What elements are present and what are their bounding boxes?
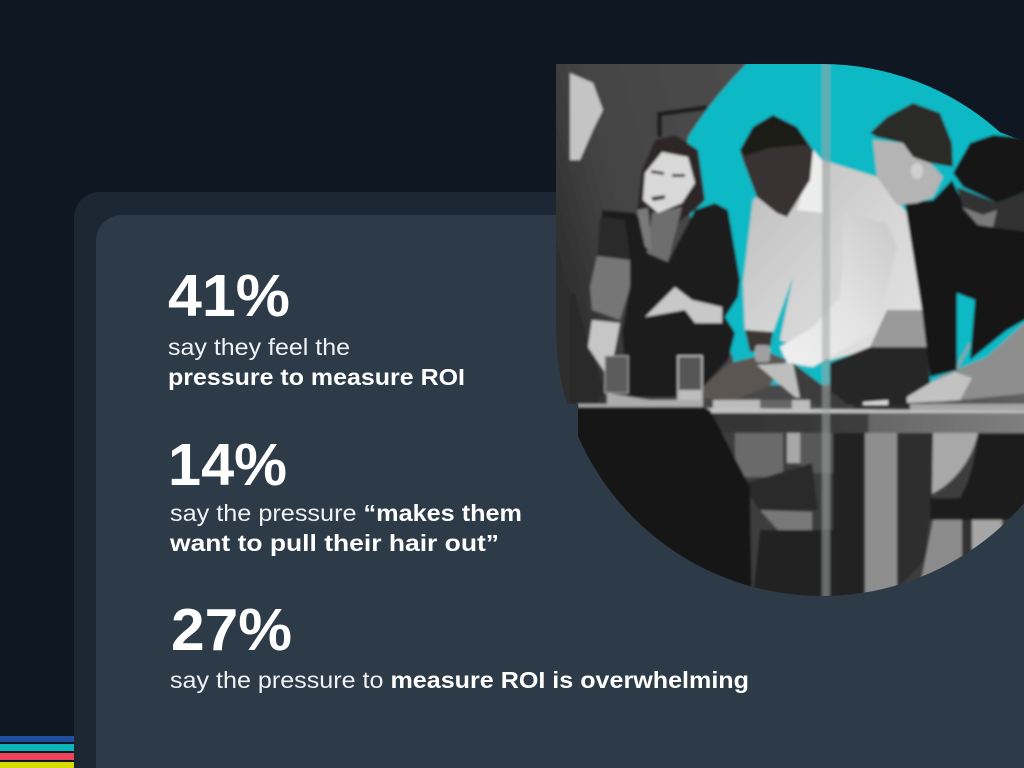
man's watch (755, 345, 770, 362)
third person's hair (953, 135, 1024, 203)
window frame (657, 105, 707, 137)
office wall (556, 64, 1024, 410)
man's trousers (830, 347, 932, 405)
woman's forearm (588, 320, 620, 377)
stat 1 (168, 263, 465, 390)
pen (956, 343, 971, 368)
papers centre (713, 400, 810, 411)
woman's dress (600, 203, 740, 397)
tablet dark (853, 405, 930, 411)
table edge (703, 408, 1024, 414)
stat 3 number: 27% (171, 597, 292, 663)
sweater hem band (870, 310, 927, 347)
floor sliver right (972, 520, 1002, 560)
chair gap (760, 510, 812, 530)
pale curved wall (932, 433, 978, 494)
pale panel (787, 433, 800, 463)
stat 3 text: say the pressure to measure ROI is overwhelming (170, 667, 749, 693)
tablet highlight (863, 400, 888, 405)
woman's face (643, 152, 695, 213)
third person's face (957, 187, 1024, 232)
knit sleeve (920, 320, 1024, 404)
dark column (833, 433, 865, 603)
stat 1 number: 41% (168, 263, 290, 329)
man's sweater body (743, 160, 922, 360)
woman's eyes and mouth (651, 170, 685, 201)
woman's hair strand (637, 208, 652, 250)
outer panel (74, 192, 1024, 768)
stat 2 text line 2: want to pull their hair out” (169, 530, 499, 556)
table leg (865, 433, 897, 603)
back room beneath table (710, 433, 1024, 603)
man's collar (797, 150, 823, 213)
second man's sweater (905, 180, 1024, 377)
photo: team around a table in a circular crop (550, 60, 1024, 608)
stat 2 text line 1: say the pressure “makes them (170, 500, 522, 526)
teal circle (686, 60, 1024, 385)
laptop lid (757, 363, 800, 398)
woman's chest (647, 207, 682, 262)
stool seat (930, 498, 1024, 520)
man's forearm (745, 330, 773, 352)
stat 2 (168, 432, 522, 556)
papers right (910, 404, 1024, 411)
stool leg (962, 520, 972, 560)
stat 2 number: 14% (168, 432, 287, 498)
water glass left (605, 356, 628, 393)
stat 1 bold text: pressure to measure ROI (168, 364, 465, 390)
floor area right (920, 520, 962, 586)
second man's face (873, 140, 943, 205)
stat 3 (170, 597, 749, 693)
foreground figure at left (570, 293, 605, 403)
chair seat (752, 530, 837, 603)
chair back (743, 463, 818, 512)
small teal gap (807, 367, 818, 380)
writing hand (907, 372, 972, 403)
colour stripes (0, 736, 74, 768)
water glass right (678, 356, 702, 403)
man's hair (740, 115, 808, 156)
man's hand (703, 353, 787, 400)
woman's upper sleeve (597, 217, 630, 260)
third person's glasses (962, 207, 997, 227)
glass partition pole (822, 60, 830, 608)
woman's lower sleeve (590, 256, 630, 320)
stat 1 text: say they feel the (168, 334, 350, 360)
mid panel (800, 433, 837, 473)
second man's hair (870, 103, 953, 167)
foreground dark chair (550, 407, 752, 605)
papers on table (578, 393, 703, 407)
woman's hair (636, 134, 706, 222)
woman's hand (645, 287, 722, 323)
inner panel (96, 215, 1024, 768)
man's face (740, 115, 813, 217)
cabinet (735, 433, 783, 477)
man's sleeve (780, 213, 897, 367)
table top (710, 413, 1024, 433)
shadow right (960, 433, 1024, 498)
trouser leg (897, 433, 933, 590)
blonde head (570, 73, 603, 160)
notebook (760, 400, 792, 411)
second man's ear (911, 163, 923, 179)
laptop back (792, 362, 850, 408)
